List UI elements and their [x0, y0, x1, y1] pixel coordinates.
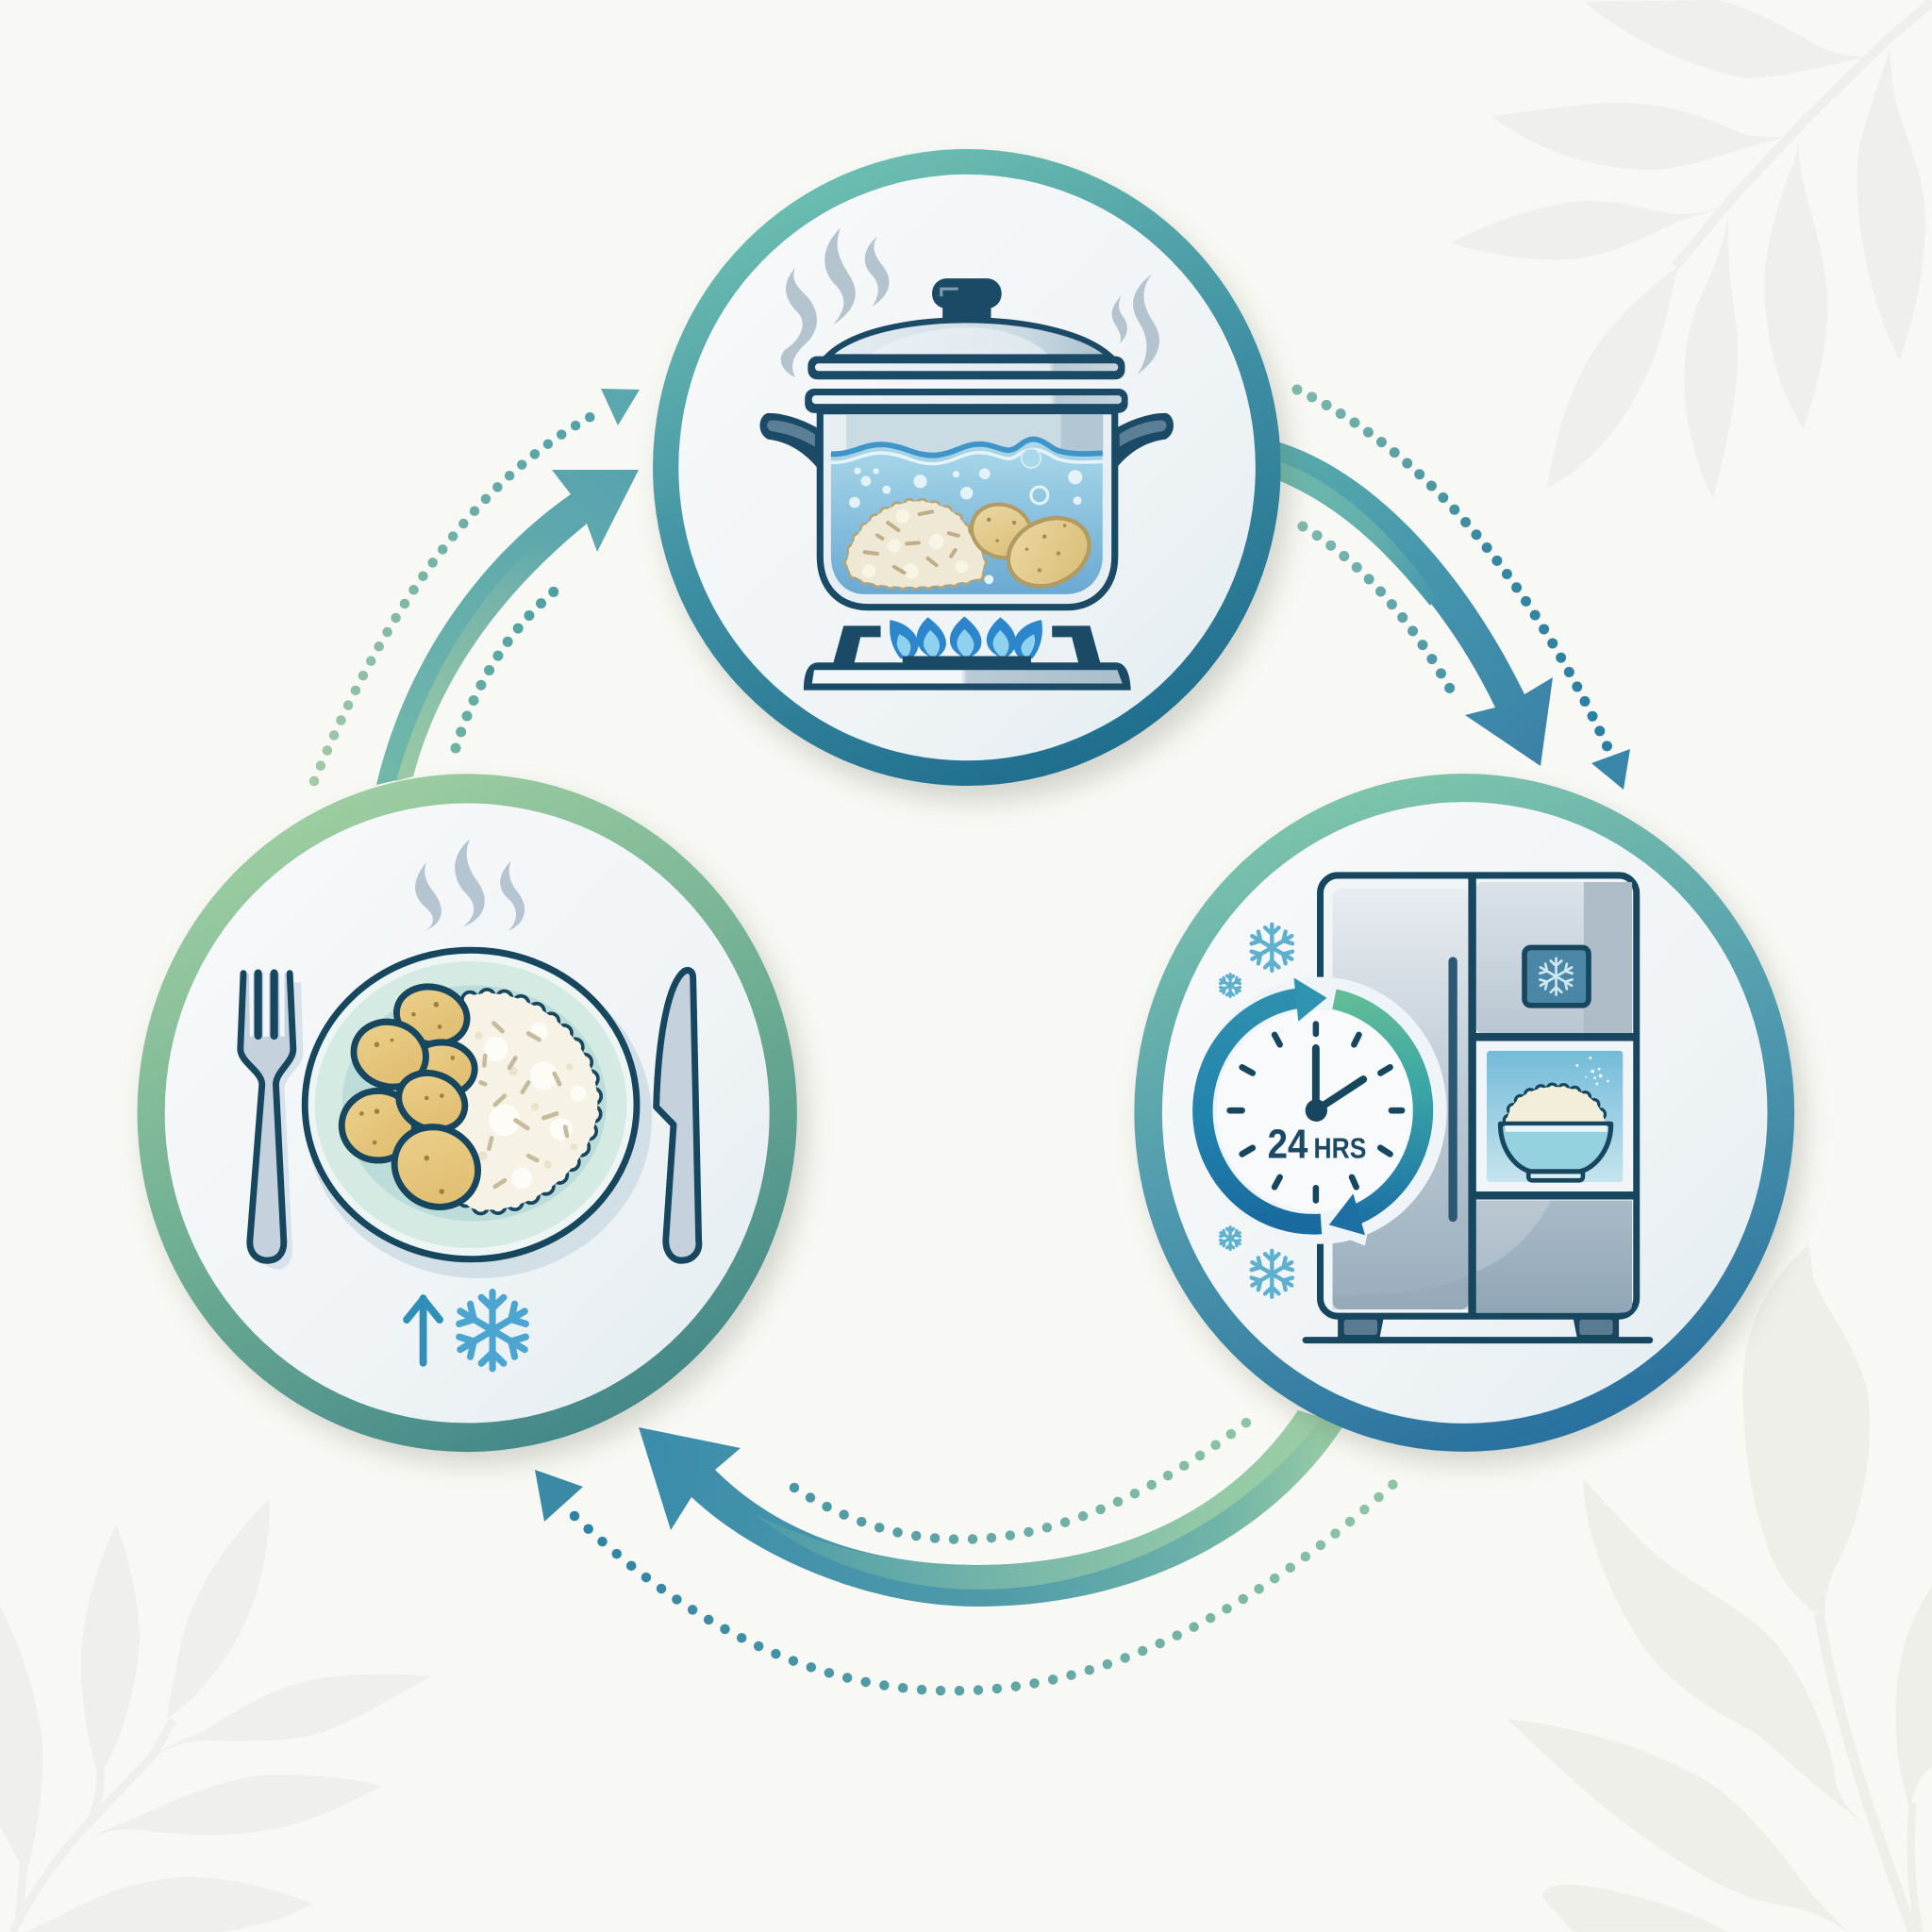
leaf sprig: top right — [1451, 0, 1932, 498]
main arrow — [376, 470, 639, 785]
icon: up arrow — [407, 1298, 440, 1363]
icon: plate — [305, 950, 652, 1278]
disc — [165, 804, 770, 1423]
icon: pot lid — [808, 278, 1124, 379]
arrow light band — [1274, 459, 1436, 606]
icon: pot body — [760, 389, 1174, 608]
icon: snowflakes — [1219, 924, 1295, 1297]
arrow light band — [755, 1410, 1321, 1590]
dotted inner arc — [456, 588, 558, 748]
fridge feet — [1338, 1316, 1384, 1339]
ring — [138, 774, 797, 1452]
potato speckles — [359, 1002, 455, 1194]
icon: steam — [415, 839, 525, 931]
icon: rice on plate — [444, 997, 593, 1206]
dotted outer arrowhead — [601, 389, 640, 425]
panel: plated meal — [138, 774, 807, 1464]
arrow: pot to fridge — [1274, 390, 1630, 790]
panel: fridge and clock — [1134, 774, 1804, 1464]
ring — [1134, 774, 1794, 1452]
icon: 24 hour clock: HRS — [1314, 1133, 1366, 1165]
leaf sprig: bottom right — [1507, 1244, 1932, 1932]
dotted outer arc — [1297, 390, 1607, 747]
icon: fork — [241, 973, 303, 1270]
bubbles — [849, 468, 1082, 584]
icon: potatoes in pot — [964, 496, 1100, 599]
icon: snowflake — [455, 1292, 530, 1369]
icon: steam — [781, 228, 1159, 377]
clock label: 24 — [1268, 1122, 1308, 1168]
arrow: plate to pot — [314, 389, 640, 785]
ring — [653, 149, 1281, 786]
dotted inner arc — [794, 1417, 1254, 1540]
leaf sprig: bottom left — [0, 1499, 431, 1932]
fridge compartment — [1487, 1051, 1623, 1182]
icon: knife — [657, 971, 699, 1260]
disc — [1162, 802, 1768, 1424]
dotted outer arrowhead — [1591, 749, 1630, 790]
dotted outer arc — [314, 410, 603, 781]
pot rim — [805, 389, 1128, 413]
main arrow — [639, 1410, 1344, 1607]
main arrow — [1274, 441, 1553, 766]
bowl of rice — [1509, 1089, 1602, 1121]
dotted outer arc — [575, 1475, 1403, 1690]
icon: rice in pot — [850, 505, 980, 584]
arrow: fridge to plate — [535, 1410, 1403, 1690]
arrow light band — [396, 524, 587, 781]
panel: boiling pot — [653, 149, 1290, 801]
icon: potatoes on plate — [341, 980, 491, 1221]
dotted inner arc — [1303, 526, 1454, 695]
icon: fridge — [1306, 875, 1650, 1341]
freezer display — [1524, 947, 1589, 1006]
disc — [678, 175, 1256, 760]
dotted outer arrowhead — [535, 1470, 583, 1522]
water — [831, 440, 1103, 594]
icon: gas burner — [804, 617, 1131, 691]
icon: 24 hour clock — [1193, 977, 1447, 1246]
